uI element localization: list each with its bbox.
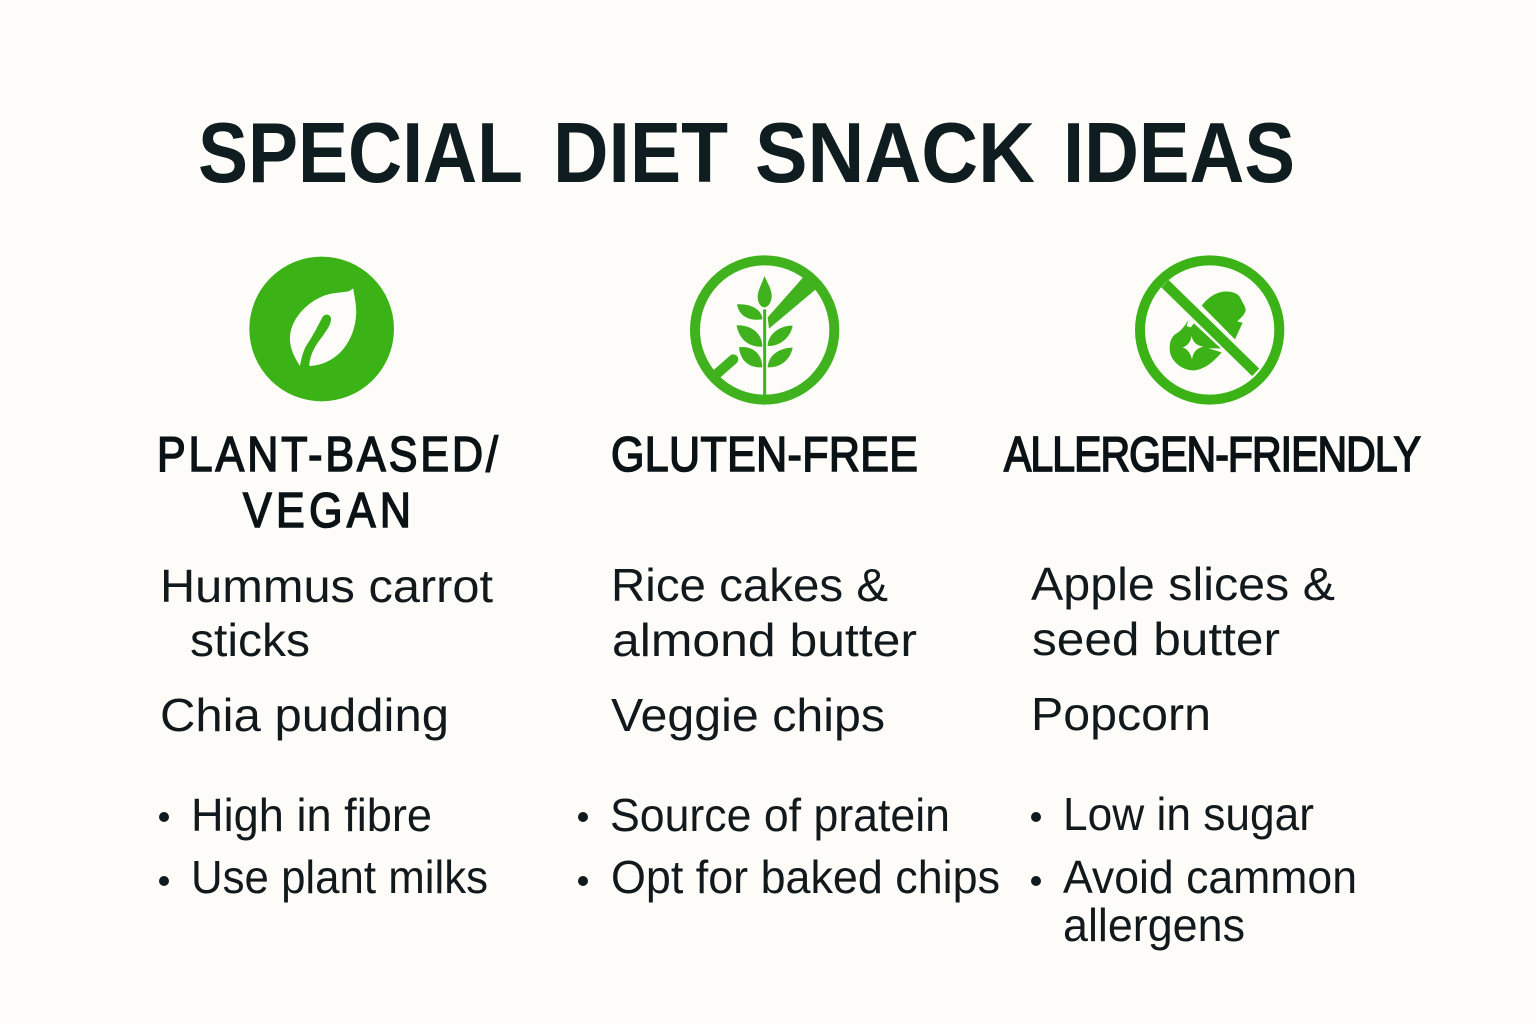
snack list: plant-based: sticks bbox=[190, 614, 310, 666]
snack list: allergen-friendly bbox=[1031, 558, 1335, 740]
heading: plant-based / vegan: VEGAN bbox=[243, 482, 411, 538]
snack list: allergen-friendly: seed butter bbox=[1032, 613, 1280, 665]
snack list: allergen-friendly: Popcorn bbox=[1031, 688, 1211, 740]
tips: plant-based bbox=[159, 789, 488, 903]
snack list: gluten-free: Veggie chips bbox=[611, 689, 885, 741]
snack list: plant-based: Chia pudding bbox=[160, 689, 449, 741]
snack list: allergen-friendly: Apple slices & bbox=[1031, 558, 1335, 610]
title: IDEAS bbox=[1063, 105, 1295, 201]
panel: plant-based / vegan bbox=[157, 257, 498, 903]
icon: crossed-out allergen bbox=[1140, 260, 1279, 400]
tips: gluten-free bbox=[578, 789, 1000, 903]
tips: gluten-free: Opt for baked chips bbox=[611, 851, 1000, 903]
title: DIET bbox=[553, 105, 728, 201]
tips: gluten-free: Source of pratein bbox=[610, 789, 950, 841]
heading: plant-based / vegan bbox=[157, 426, 498, 538]
tips: allergen-friendly: allergens bbox=[1063, 899, 1245, 951]
snack list: gluten-free: almond butter bbox=[612, 614, 917, 666]
icon: crossed-out wheat bbox=[695, 260, 834, 400]
title: SPECIAL bbox=[198, 105, 523, 201]
snack list: plant-based: Hummus carrot bbox=[160, 560, 493, 612]
heading: allergen-friendly: ALLERGEN-FRIENDLY bbox=[1004, 426, 1421, 482]
panel: gluten-free bbox=[578, 260, 1000, 903]
snack list: gluten-free bbox=[611, 559, 917, 741]
heading: plant-based / vegan: PLANT-BASED/ bbox=[157, 426, 498, 482]
tips: plant-based: Use plant milks bbox=[191, 851, 488, 903]
tips: allergen-friendly bbox=[1031, 788, 1357, 951]
icon: leaf in green circle bbox=[249, 257, 394, 401]
snack list: plant-based bbox=[160, 560, 493, 741]
title bbox=[198, 105, 1295, 201]
tips: allergen-friendly: Avoid cammon bbox=[1063, 851, 1357, 903]
panel: allergen-friendly bbox=[1004, 260, 1421, 951]
tips: plant-based: High in fibre bbox=[191, 789, 432, 841]
title: SNACK bbox=[755, 105, 1035, 201]
snack list: gluten-free: Rice cakes & bbox=[611, 559, 888, 611]
tips: allergen-friendly: Low in sugar bbox=[1063, 788, 1314, 840]
heading: gluten-free: GLUTEN-FREE bbox=[611, 426, 918, 482]
